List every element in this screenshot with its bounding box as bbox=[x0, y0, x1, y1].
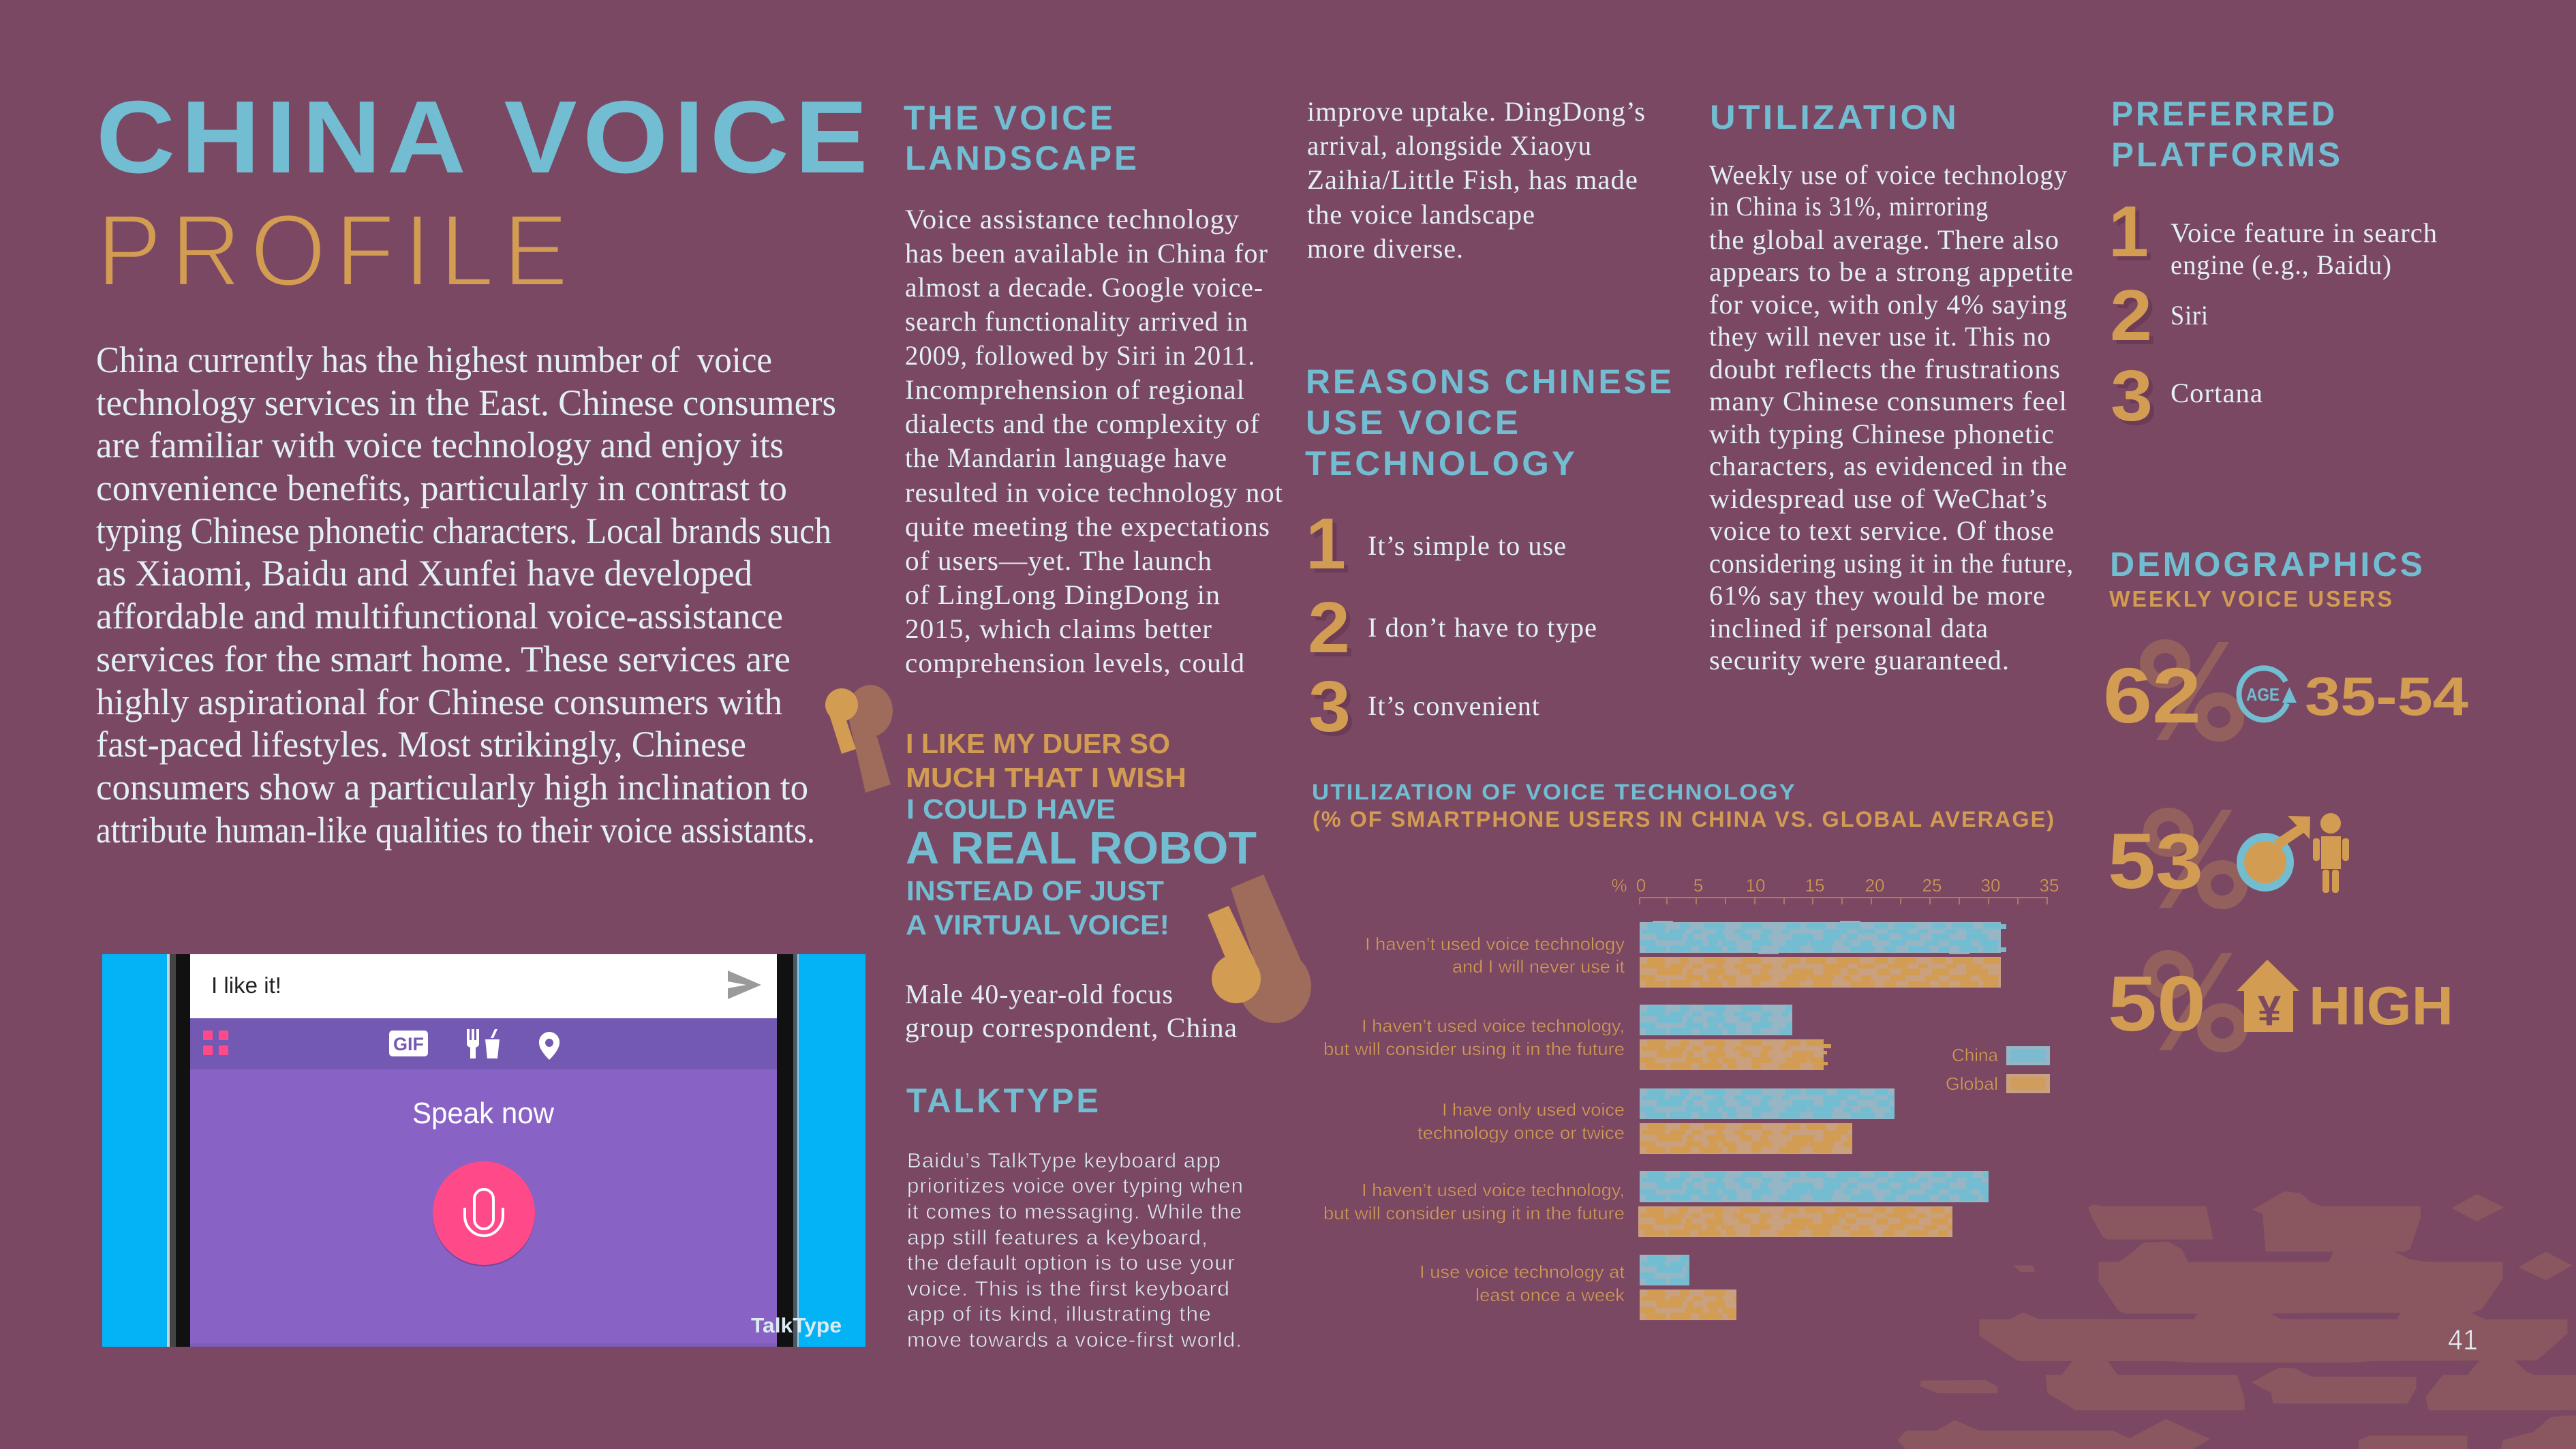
platform 3: 3 bbox=[2115, 360, 2157, 440]
bar group: never use: I haven’t used voice technology bbox=[1365, 934, 1625, 954]
chart axis: 15 bbox=[1805, 875, 1824, 896]
intro text block: typing Chinese phonetic characters. Local brands such bbox=[96, 510, 831, 551]
icon: person bbox=[2313, 813, 2349, 893]
percent sign bbox=[2150, 953, 2241, 1050]
talktype text: it comes to messaging. While the bbox=[907, 1200, 1242, 1223]
label: 35-54 bbox=[2305, 666, 2469, 727]
heading: the voice landscape bbox=[904, 99, 1139, 177]
icon: male symbol bbox=[2237, 816, 2310, 891]
bar group: once or twice bbox=[1417, 1088, 1895, 1154]
bar group: never use bbox=[1365, 921, 2006, 988]
platform 3: 3 bbox=[2111, 356, 2153, 436]
screenshot caption: TalkType bbox=[751, 1313, 842, 1337]
talktype text: move towards a voice-first world. bbox=[907, 1328, 1242, 1352]
legend: Global bbox=[1946, 1073, 1998, 1094]
utilization text: inclined if personal data bbox=[1709, 613, 1989, 643]
voice landscape text: Incomprehension of regional bbox=[905, 374, 1245, 405]
utilization text: considering using it in the future, bbox=[1709, 548, 2074, 579]
intro text block: China currently has the highest number of voice bbox=[96, 339, 772, 380]
title line: Profile: PROFILE bbox=[97, 193, 577, 307]
icon: fork and cup bbox=[467, 1029, 500, 1058]
landscape text continued: Zaihia/Little Fish, has made bbox=[1307, 164, 1638, 195]
platform 1: engine (e.g., Baidu) bbox=[2171, 249, 2392, 280]
app screenshot: TalkType bbox=[102, 954, 865, 1347]
voice landscape text: 2009, followed by Siri in 2011. bbox=[905, 340, 1255, 371]
quote callout bbox=[906, 728, 1257, 941]
platforms ranked list bbox=[2109, 192, 2438, 440]
bar group: once or twice: technology once or twice bbox=[1417, 1123, 1625, 1143]
quote callout: A REAL ROBOT bbox=[906, 823, 1257, 874]
subheading: weekly voice users: WEEKLY VOICE USERS bbox=[2109, 586, 2394, 611]
intro text block: as Xiaomi, Baidu and Xunfei have developed bbox=[96, 553, 752, 594]
voice landscape text: the Mandarin language have bbox=[905, 442, 1227, 473]
intro text block: attribute human-like qualities to their voice assistants. bbox=[96, 810, 815, 851]
landscape text continued: more diverse. bbox=[1307, 233, 1464, 264]
voice panel bbox=[190, 1069, 777, 1347]
icon: GIF bbox=[389, 1031, 428, 1056]
heading: the voice landscape: LANDSCAPE bbox=[905, 139, 1139, 177]
voice landscape text bbox=[905, 204, 1283, 678]
landscape text continued bbox=[1307, 96, 1646, 264]
voice landscape text: of users—yet. The launch bbox=[905, 545, 1212, 576]
intro text block: affordable and multifunctional voice-assistance bbox=[96, 596, 783, 637]
chart title bbox=[1312, 780, 2055, 832]
page number: 41 bbox=[2448, 1324, 2478, 1356]
bar group: will consider bbox=[1323, 1005, 1831, 1070]
utilization text: in China is 31%, mirroring bbox=[1709, 191, 1989, 222]
voice landscape text: quite meeting the expectations bbox=[905, 511, 1270, 542]
icon: age bbox=[2239, 668, 2297, 720]
quote attribution: group correspondent, China bbox=[905, 1012, 1238, 1043]
chart axis bbox=[1611, 875, 2059, 904]
utilization text: characters, as evidenced in the bbox=[1709, 451, 2068, 481]
chart axis: 35 bbox=[2040, 875, 2059, 896]
bar group: weekly: I use voice technology at bbox=[1420, 1262, 1625, 1282]
icon: closing quote mark bbox=[1208, 874, 1311, 1023]
platform 3: Cortana bbox=[2171, 378, 2263, 408]
heading: the voice landscape: THE VOICE bbox=[904, 99, 1116, 137]
heading: reasons chinese use voice technology: USE VOICE bbox=[1306, 403, 1521, 442]
talktype text: app of its kind, illustrating the bbox=[907, 1302, 1212, 1326]
rank 2: 2 bbox=[1308, 588, 1350, 668]
utilization text: doubt reflects the frustrations bbox=[1709, 354, 2061, 384]
icon: map pin bbox=[539, 1032, 559, 1060]
percent sign bbox=[2147, 642, 2237, 740]
stat: 53 percent male bbox=[2108, 810, 2349, 908]
utilization text: for voice, with only 4% saying bbox=[1709, 289, 2068, 320]
quote attribution bbox=[905, 979, 1238, 1043]
icon: house with yen bbox=[2237, 960, 2299, 1035]
intro text block: technology services in the East. Chinese consumers bbox=[96, 382, 836, 423]
platform 2: 2 bbox=[2114, 279, 2156, 360]
heading: preferred platforms: PLATFORMS bbox=[2111, 136, 2343, 174]
bar group: will consider, second row: but will consider using it in the future bbox=[1323, 1203, 1625, 1223]
voice landscape text: search functionality arrived in bbox=[905, 306, 1248, 337]
platform 1: Voice feature in search bbox=[2171, 217, 2438, 248]
heading: preferred platforms: PREFERRED bbox=[2111, 95, 2337, 133]
title bbox=[96, 79, 874, 307]
rank 2 bbox=[1308, 588, 1597, 672]
heading: utilization: UTILIZATION bbox=[1710, 98, 1959, 136]
chart axis: 30 bbox=[1981, 875, 2000, 896]
rank 2: 2 bbox=[1312, 592, 1354, 672]
utilization text: Weekly use of voice technology bbox=[1709, 159, 2068, 190]
chart axis: 0 bbox=[1636, 875, 1646, 896]
toolbar bbox=[190, 1018, 777, 1069]
icon: pink grid bbox=[203, 1031, 228, 1055]
utilization text bbox=[1709, 159, 2074, 675]
voice landscape text: comprehension levels, could bbox=[905, 647, 1245, 678]
rank 1 bbox=[1306, 504, 1567, 588]
utilization text: security were guaranteed. bbox=[1709, 645, 2010, 675]
icon: microphone button bbox=[433, 1161, 535, 1266]
value: 50 bbox=[2108, 960, 2206, 1048]
utilization text: they will never use it. This no bbox=[1709, 321, 2051, 352]
talktype text: prioritizes voice over typing when bbox=[907, 1174, 1244, 1198]
rank 3: 3 bbox=[1308, 667, 1351, 747]
platform 1: 1 bbox=[2113, 196, 2153, 276]
message text: I like it! bbox=[211, 973, 281, 998]
intro text block: highly aspirational for Chinese consumers with bbox=[96, 682, 782, 722]
quote callout: A VIRTUAL VOICE! bbox=[906, 909, 1169, 941]
utilization text: with typing Chinese phonetic bbox=[1709, 418, 2055, 449]
rank 1: 1 bbox=[1306, 504, 1346, 584]
quote callout: MUCH THAT I WISH bbox=[906, 762, 1186, 793]
heading: reasons chinese use voice technology bbox=[1305, 363, 1674, 483]
utilization text: voice to text service. Of those bbox=[1709, 515, 2055, 546]
label: HIGH bbox=[2309, 975, 2453, 1036]
heading: reasons chinese use voice technology: REASONS CHINESE bbox=[1306, 363, 1674, 401]
voice landscape text: Voice assistance technology bbox=[905, 204, 1240, 234]
rank 1: It’s simple to use bbox=[1368, 530, 1567, 561]
utilization text: many Chinese consumers feel bbox=[1709, 386, 2068, 416]
utilization text: 61% say they would be more bbox=[1709, 580, 2046, 611]
chart axis: 25 bbox=[1922, 875, 1942, 896]
bar chart bbox=[1323, 875, 2059, 1320]
reasons ranked list bbox=[1306, 504, 1597, 751]
bar group: will consider, second row: I haven’t used voice technology, bbox=[1362, 1180, 1625, 1200]
icon: house with yen: ¥ bbox=[2258, 988, 2282, 1035]
platform 2: Siri bbox=[2171, 300, 2209, 331]
chart axis: 10 bbox=[1746, 875, 1765, 896]
icon: send arrow bbox=[728, 971, 761, 999]
title line: China Voice: CHINA VOICE bbox=[96, 79, 874, 194]
quote callout: I COULD HAVE bbox=[906, 793, 1116, 825]
chart title: UTILIZATION OF VOICE TECHNOLOGY bbox=[1312, 780, 1796, 804]
message bar bbox=[190, 954, 777, 1018]
landscape text continued: the voice landscape bbox=[1307, 199, 1535, 230]
heading: reasons chinese use voice technology: TECHNOLOGY bbox=[1305, 444, 1578, 483]
platform 2 bbox=[2110, 275, 2209, 360]
quote callout: I LIKE MY DUER SO bbox=[906, 728, 1170, 759]
utilization text: widespread use of WeChat’s bbox=[1709, 483, 2048, 514]
icon: GIF: GIF bbox=[393, 1034, 424, 1054]
bar group: once or twice: I have only used voice bbox=[1442, 1099, 1625, 1120]
legend bbox=[1946, 1045, 2050, 1094]
chart axis: % bbox=[1611, 875, 1627, 896]
voice landscape text: has been available in China for bbox=[905, 238, 1268, 269]
chart title: (% OF SMARTPHONE USERS IN CHINA VS. GLOBAL AVERAGE) bbox=[1313, 807, 2055, 832]
rank 2: I don’t have to type bbox=[1368, 612, 1597, 643]
background pattern: cloud shapes bbox=[1899, 1192, 2576, 1449]
legend: China bbox=[1952, 1045, 1999, 1065]
talktype text: Baidu’s TalkType keyboard app bbox=[907, 1148, 1221, 1172]
landscape text continued: arrival, alongside Xiaoyu bbox=[1307, 130, 1592, 161]
heading: preferred platforms bbox=[2111, 95, 2343, 174]
utilization text: appears to be a strong appetite bbox=[1709, 256, 2074, 287]
intro text block: fast-paced lifestyles. Most strikingly, Chinese bbox=[96, 724, 746, 765]
platform 1: 1 bbox=[2109, 192, 2149, 272]
platform 2: 2 bbox=[2110, 275, 2152, 356]
voice landscape text: of LingLong DingDong in bbox=[905, 579, 1221, 610]
talktype text: app still features a keyboard, bbox=[907, 1225, 1208, 1249]
value: 53 bbox=[2108, 818, 2203, 905]
voice landscape text: almost a decade. Google voice- bbox=[905, 272, 1263, 303]
platform 3 bbox=[2111, 356, 2263, 440]
icon: opening quote mark bbox=[825, 685, 893, 793]
chart axis: 5 bbox=[1693, 875, 1703, 896]
value: 62 bbox=[2103, 652, 2201, 739]
bar group: never use: and I will never use it bbox=[1452, 956, 1625, 977]
stat: 62 percent aged 35-54 bbox=[2103, 642, 2469, 740]
bar group: will consider, second row bbox=[1323, 1171, 1989, 1237]
voice landscape text: 2015, which claims better bbox=[905, 613, 1212, 644]
talktype text bbox=[907, 1148, 1244, 1352]
talktype text: the default option is to use your bbox=[907, 1251, 1236, 1275]
heading: demographics: DEMOGRAPHICS bbox=[2110, 545, 2425, 583]
bar group: will consider: but will consider using it in the future bbox=[1323, 1039, 1625, 1059]
talktype text: voice. This is the first keyboard bbox=[907, 1277, 1230, 1300]
platform 1 bbox=[2109, 192, 2438, 280]
intro text block bbox=[96, 339, 836, 851]
bar group: weekly: least once a week bbox=[1475, 1285, 1625, 1305]
quote attribution: Male 40-year-old focus bbox=[905, 979, 1174, 1009]
intro text block: consumers show a particularly high inclination to bbox=[96, 767, 808, 808]
bar group: will consider: I haven’t used voice technology, bbox=[1362, 1016, 1625, 1036]
percent sign bbox=[2150, 810, 2241, 908]
heading: talktype: TALKTYPE bbox=[906, 1082, 1101, 1120]
rank 1: 1 bbox=[1310, 508, 1350, 588]
voice landscape text: dialects and the complexity of bbox=[905, 408, 1260, 439]
rank 3: 3 bbox=[1313, 671, 1355, 751]
quote callout: INSTEAD OF JUST bbox=[906, 875, 1164, 906]
rank 3: It’s convenient bbox=[1368, 690, 1540, 721]
voice landscape text: resulted in voice technology not bbox=[905, 477, 1283, 508]
intro text block: are familiar with voice technology and enjoy its bbox=[96, 425, 784, 466]
intro text block: services for the smart home. These services are bbox=[96, 639, 791, 680]
landscape text continued: improve uptake. DingDong’s bbox=[1307, 96, 1646, 127]
heading: demographics bbox=[2109, 545, 2425, 611]
icon: age: AGE bbox=[2246, 684, 2280, 705]
chart axis: 20 bbox=[1865, 875, 1884, 896]
speak now text: Speak now bbox=[412, 1097, 554, 1130]
intro text block: convenience benefits, particularly in contrast to bbox=[96, 468, 787, 508]
stat: 50 percent high income bbox=[2108, 953, 2453, 1050]
rank 3 bbox=[1308, 667, 1540, 751]
utilization text: the global average. There also bbox=[1709, 224, 2059, 255]
bar group: weekly bbox=[1420, 1255, 1736, 1320]
